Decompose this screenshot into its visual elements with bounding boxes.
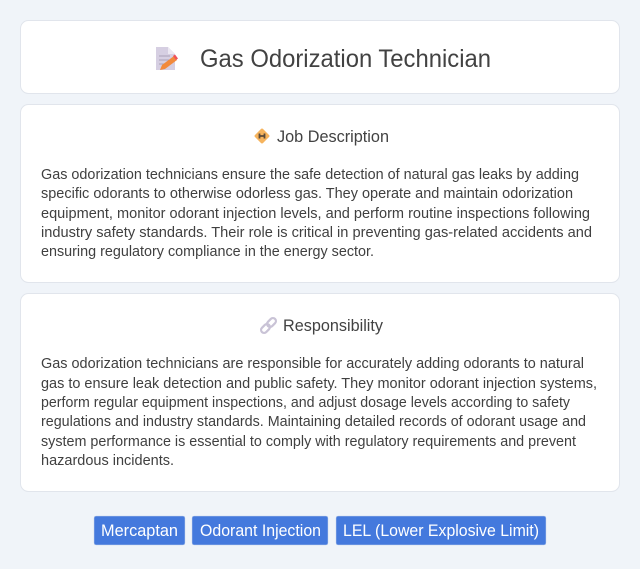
tag: LEL xyxy=(336,516,546,545)
text block: responsibility: hazardous incidents. xyxy=(41,453,174,469)
panel: responsibility xyxy=(20,294,620,492)
text block: job description: industry safety standards. Their role is critical in preventing gas-related accidents and xyxy=(41,225,592,241)
text block: responsibility: perform regular equipment inspections, and adjust dosage levels according to safety xyxy=(41,395,571,411)
text block: responsibility: regulations and industry standards. Maintaining detailed records of odorant usage and xyxy=(41,414,586,430)
tag: Mercaptan: Mercaptan xyxy=(101,522,178,540)
text block: responsibility: gas to ensure leak detection and public safety. They monitor odorant injection systems, xyxy=(41,376,597,392)
heading: responsibility: Responsibility xyxy=(283,317,384,335)
text block: responsibility xyxy=(41,356,597,469)
icon: chain link xyxy=(260,317,277,334)
text block: responsibility: system performance is essential to comply with regulatory requirements and prevent xyxy=(41,434,576,450)
text block: job description: ensuring regulatory compliance in the energy sector. xyxy=(41,244,374,260)
text block: job description: specific odorants to otherwise odorless gas. They operate and maintain odorization xyxy=(41,186,573,202)
title: Gas Odorization Technician xyxy=(200,45,491,73)
panel: title header xyxy=(20,20,620,94)
text block: job description: equipment, monitor odorant injection levels, and perform routine inspections following xyxy=(41,206,590,222)
panel: job description xyxy=(20,104,620,282)
text block: job description: Gas odorization technicians ensure the safe detection of natural gas leaks by adding xyxy=(41,167,579,183)
heading: job description: Job Description xyxy=(277,128,389,146)
tag: Odorant Injection: Odorant Injection xyxy=(200,522,321,540)
tag: LEL: LEL (Lower Explosive Limit) xyxy=(343,522,539,540)
icon: orange diamond xyxy=(254,128,270,144)
icon: document with pencil xyxy=(156,47,178,70)
text block: responsibility: Gas odorization technicians are responsible for accurately adding odorants to natural xyxy=(41,356,584,372)
text block: job description xyxy=(41,167,592,260)
tag: Mercaptan xyxy=(94,516,185,545)
tag: Odorant Injection xyxy=(192,516,328,545)
